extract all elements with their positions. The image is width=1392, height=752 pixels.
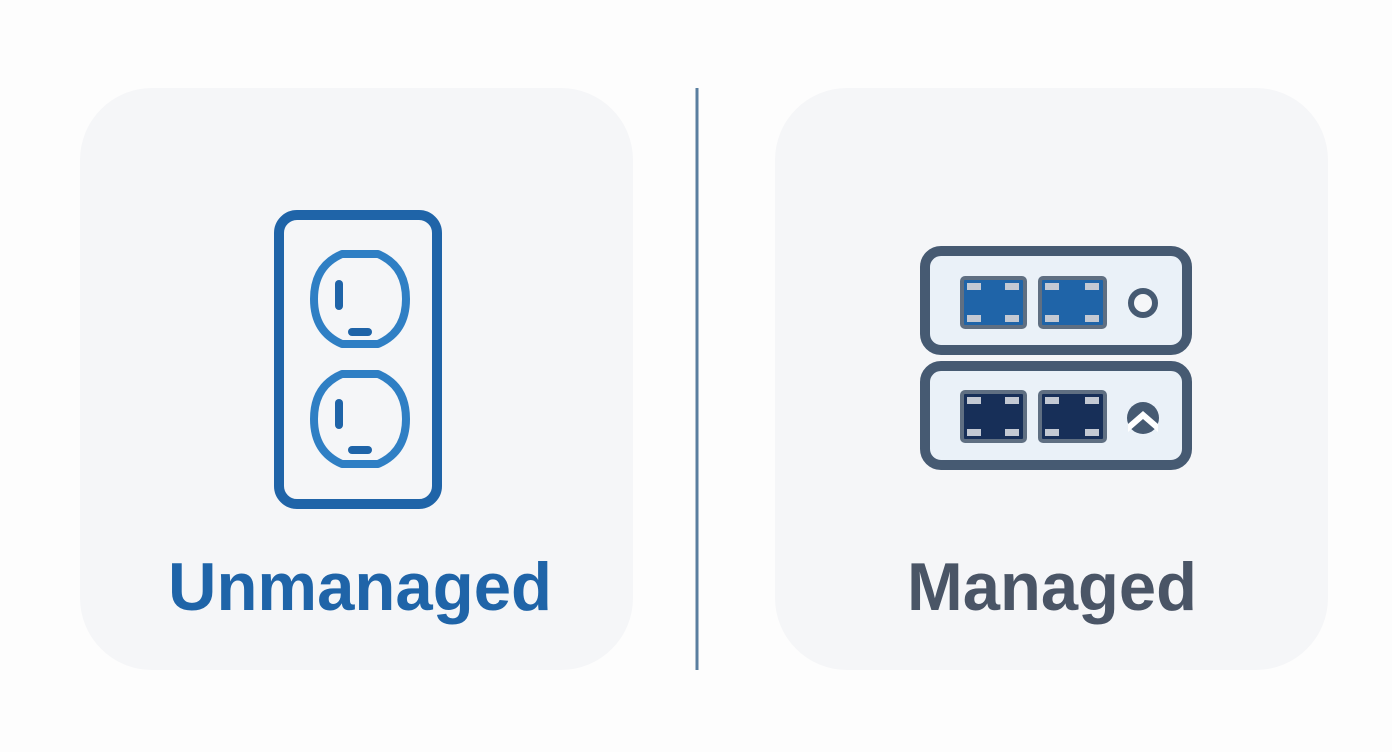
divider [696, 88, 698, 670]
panel: unmanaged [80, 88, 633, 670]
panel: managed [775, 88, 1328, 670]
icon: network switch [925, 251, 1187, 465]
label: Unmanaged: Unmanaged [168, 549, 552, 625]
label: Managed: Managed [907, 549, 1197, 625]
icon: power outlet [279, 215, 437, 504]
